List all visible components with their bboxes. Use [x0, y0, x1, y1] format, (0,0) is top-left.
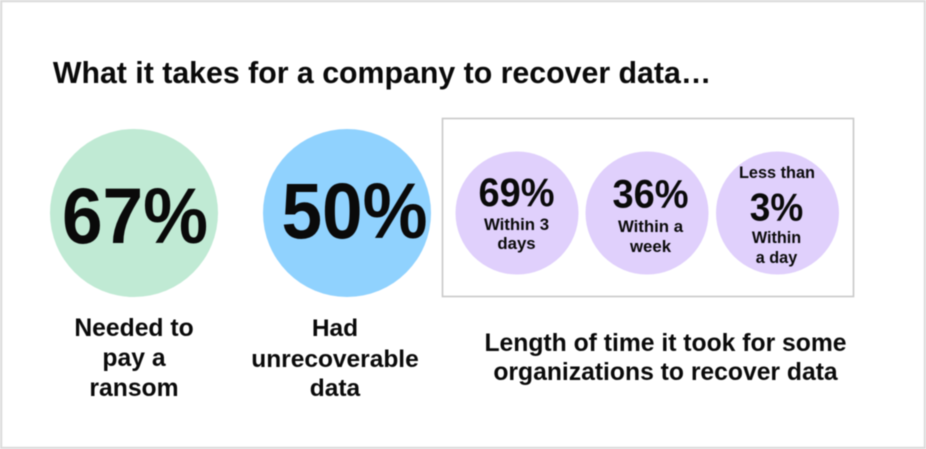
caption: needed to pay a ransom	[74, 315, 194, 402]
caption: needed to pay a ransom: ransom	[89, 375, 179, 402]
stat: 69% within 3 days: 69%	[478, 171, 555, 215]
stat: less than 3% within a day: 3%	[750, 187, 803, 230]
caption: length of time: organizations to recover data	[493, 359, 838, 386]
value: 67%: 67%	[62, 172, 208, 261]
value: 50%: 50%	[281, 167, 428, 256]
caption: had unrecoverable data	[251, 315, 419, 402]
caption: had unrecoverable data: Had	[312, 315, 358, 342]
title: What it takes for a company to recover data…	[53, 57, 711, 90]
stat: less than 3% within a day	[716, 152, 839, 274]
stat: 69% within 3 days	[456, 152, 578, 274]
stat: less than 3% within a day: a day	[756, 249, 797, 267]
caption: length of time	[484, 330, 847, 386]
stat: 69% within 3 days: days	[497, 234, 536, 253]
caption: had unrecoverable data: data	[310, 375, 361, 402]
stat: 69% within 3 days: Within 3	[484, 215, 549, 234]
caption: length of time: Length of time it took for some	[484, 330, 847, 357]
stat: 36% within a week	[586, 152, 708, 274]
stat: 36% within a week: Within a	[618, 217, 684, 236]
circle: 67%	[50, 129, 218, 297]
panel: recovery time box	[442, 118, 854, 296]
panel: unrecoverable stat	[251, 129, 431, 402]
stat: 36% within a week: week	[629, 237, 672, 256]
stat: less than 3% within a day: Within	[752, 229, 801, 247]
caption: had unrecoverable data: unrecoverable	[251, 346, 419, 373]
stat: less than 3% within a day: Less than	[739, 164, 815, 182]
circle: 50%	[263, 129, 431, 297]
stat: 36% within a week: 36%	[612, 173, 689, 217]
panel: ransom stat	[50, 129, 218, 402]
caption: needed to pay a ransom: pay a	[102, 345, 166, 372]
caption: needed to pay a ransom: Needed to	[74, 315, 194, 342]
